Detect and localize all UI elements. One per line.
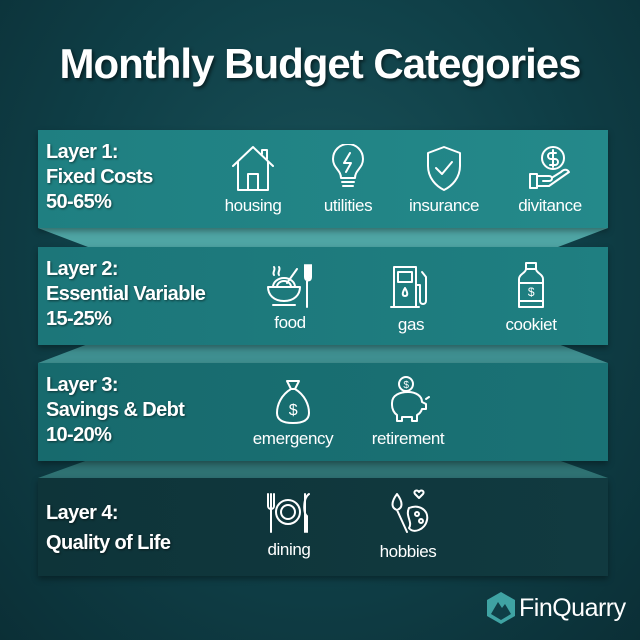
item dining: dining <box>268 540 310 559</box>
item housing <box>225 146 281 215</box>
label layer 2: Essential Variable <box>46 283 205 305</box>
item hobbies: hobbies <box>380 542 436 561</box>
label layer 3: Savings & Debt <box>46 399 184 421</box>
item retirement <box>372 376 444 448</box>
item cookiet: $ <box>528 285 535 299</box>
label layer 2: Layer 2: <box>46 258 118 280</box>
item emergency: $ <box>289 402 298 419</box>
label layer 3 <box>46 374 186 446</box>
item cookiet: cookiet <box>505 315 557 334</box>
label layer 4 <box>46 502 172 554</box>
label layer 1 <box>46 141 154 213</box>
item housing: housing <box>225 196 281 215</box>
label layer 2 <box>46 258 207 330</box>
item emergency <box>253 380 334 448</box>
item divitance <box>518 146 582 215</box>
panel: layer 3 <box>38 363 608 461</box>
connector 3 <box>38 461 608 478</box>
label layer 1: Fixed Costs <box>46 166 153 188</box>
label layer 4: Layer 4: <box>46 502 118 524</box>
item retirement: retirement <box>372 429 444 448</box>
item dining <box>267 493 310 559</box>
label layer 1: Layer 1: <box>46 141 118 163</box>
item food: food <box>274 313 306 332</box>
item gas: gas <box>398 315 424 334</box>
connector 1 <box>38 228 608 247</box>
item food <box>267 264 312 332</box>
panel: layer 4 <box>38 478 608 576</box>
item divitance: divitance <box>518 196 582 215</box>
label layer 2: 15-25% <box>46 308 111 330</box>
connector 2 <box>38 345 608 363</box>
logo <box>487 592 626 624</box>
title: Monthly Budget Categories <box>59 40 581 87</box>
item cookiet <box>505 262 557 334</box>
label layer 4: Quality of Life <box>46 532 170 554</box>
item gas <box>390 266 427 334</box>
item emergency: emergency <box>253 429 333 448</box>
label layer 3: 10-20% <box>46 424 111 446</box>
item hobbies <box>380 490 436 561</box>
panel: layer 1 <box>38 130 608 228</box>
label layer 1: 50-65% <box>46 191 111 213</box>
item utilities: utilities <box>324 196 372 215</box>
label layer 3: Layer 3: <box>46 374 118 396</box>
icon: mountain <box>487 592 515 624</box>
item insurance: insurance <box>409 196 479 215</box>
item insurance <box>409 146 479 215</box>
logo text: FinQuarry <box>519 594 626 622</box>
item utilities <box>324 144 372 215</box>
panel: layer 2 <box>38 247 608 345</box>
item retirement: $ <box>403 380 409 391</box>
